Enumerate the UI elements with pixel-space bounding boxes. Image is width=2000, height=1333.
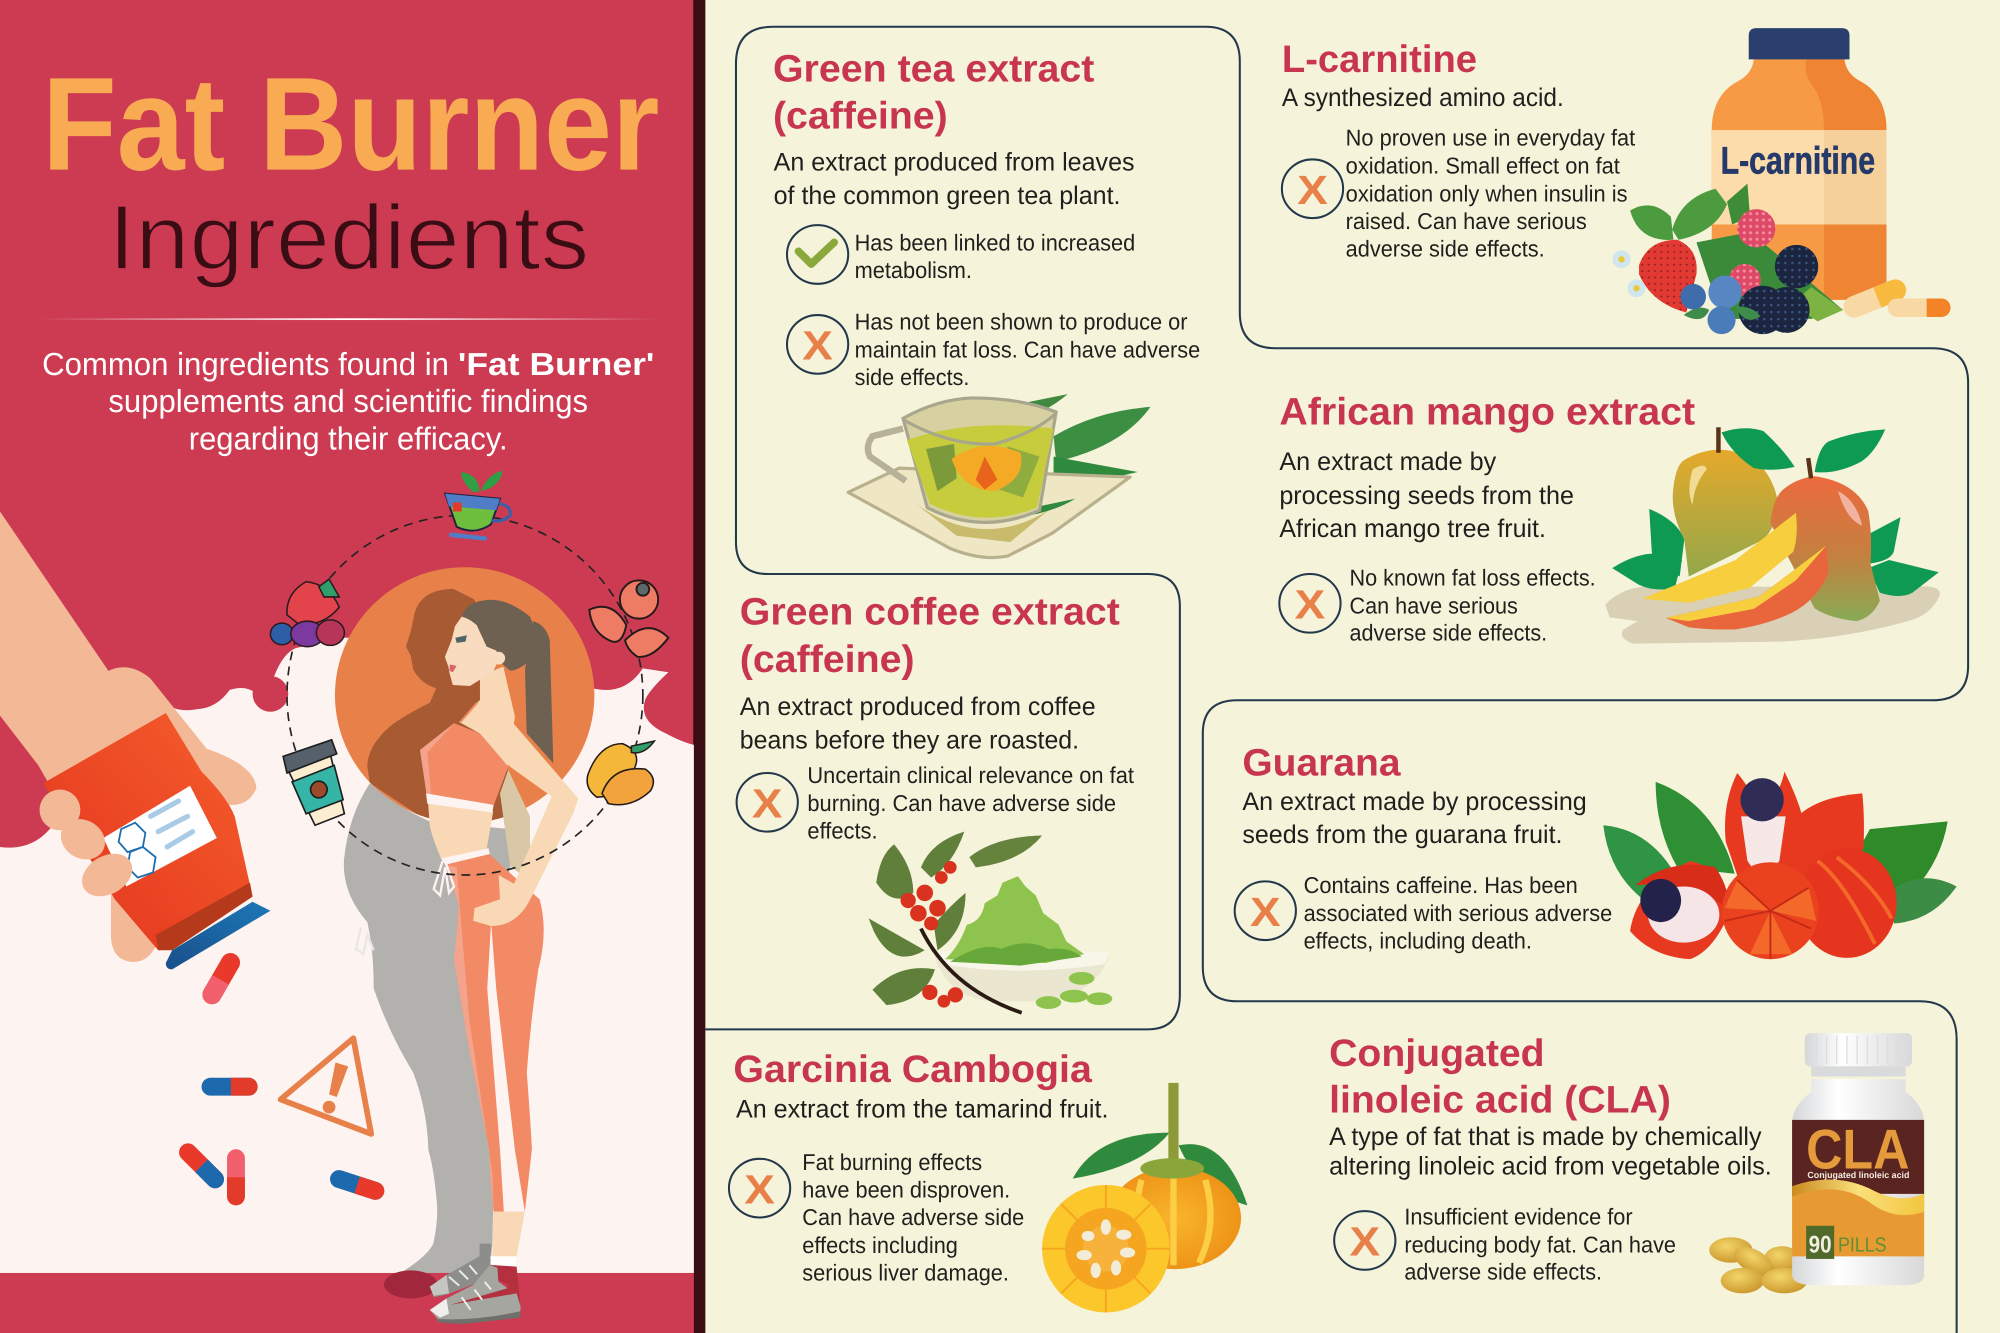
finding: benefit: metabolism. — [855, 258, 972, 283]
description — [1279, 448, 1574, 543]
panel: African mango extract — [1279, 391, 1940, 645]
finding: burning. Can have adverse side — [807, 791, 1116, 816]
description: An extract made by processing — [1242, 788, 1587, 816]
face — [445, 612, 503, 686]
finding: effects, including death. — [1304, 928, 1532, 953]
bottom band — [0, 1273, 694, 1333]
shoes and floor shadow — [384, 1244, 521, 1324]
illustration: L-carnitine bottle — [1712, 28, 1951, 321]
illustration: CLA bottle: PILLS — [1838, 1235, 1886, 1256]
panel: guarana — [1235, 742, 1957, 959]
illustration: CLA softgels — [1709, 1237, 1807, 1293]
icon: x: X — [744, 1166, 776, 1212]
intro text: supplements and scientific findings — [108, 384, 588, 420]
finding: negative: maintain fat loss. Can have adverse — [855, 337, 1200, 363]
illustration: mangoes — [1605, 427, 1940, 644]
heading: Conjugated — [1329, 1033, 1545, 1075]
panel borders — [705, 27, 1968, 1333]
illustration: green coffee — [869, 832, 1112, 1013]
finding: negative: side effects. — [855, 365, 969, 390]
heading: (caffeine) — [740, 639, 915, 681]
title: Fat Burner: Fat Burner — [42, 51, 659, 199]
description — [740, 693, 1096, 755]
description: A synthesized amino acid. — [1282, 84, 1564, 112]
finding: No known fat loss effects. — [1349, 565, 1596, 591]
intro text — [42, 347, 654, 457]
leggings — [445, 853, 544, 1212]
heading — [1329, 1033, 1671, 1122]
panel: green tea extract — [773, 48, 1200, 558]
finding: effects including — [802, 1233, 958, 1258]
heading — [740, 592, 1120, 681]
dashed orbit — [287, 515, 643, 875]
finding: adverse side effects. — [1346, 236, 1545, 261]
finding: Can have adverse side — [802, 1205, 1024, 1230]
finding: adverse side effects. — [1404, 1259, 1602, 1284]
description — [774, 149, 1135, 210]
finding: Contains caffeine. Has been — [1304, 872, 1578, 898]
finding: negative — [855, 309, 1200, 390]
illustration: CLA bottle: CLA — [1806, 1119, 1909, 1181]
back arm — [500, 770, 530, 875]
arm and hand — [473, 707, 578, 926]
panel: garcinia cambogia — [729, 1049, 1247, 1313]
icon: x: X — [1250, 889, 1282, 935]
illustration: CLA bottle: 90 — [1809, 1232, 1832, 1259]
finding: effects. — [807, 818, 878, 844]
finding: Fat burning effects — [802, 1150, 982, 1175]
illustration: berries — [1613, 184, 1843, 334]
finding: benefit: Has been linked to increased — [855, 230, 1135, 255]
finding: Insufficient evidence for — [1404, 1204, 1633, 1230]
description: An extract produced from coffee — [740, 693, 1096, 721]
finding: oxidation only when insulin is — [1346, 181, 1628, 207]
description: beans before they are roasted. — [740, 727, 1079, 755]
finding — [1349, 565, 1596, 645]
icon: x: X — [1349, 1219, 1381, 1265]
description: seeds from the guarana fruit. — [1242, 821, 1562, 849]
sports top — [420, 723, 508, 807]
icon: x — [729, 1159, 790, 1217]
icon: guarana nuts — [589, 580, 668, 657]
panel: left title and illustration — [0, 0, 705, 1333]
icon: x — [787, 315, 848, 374]
finding: reducing body fat. Can have — [1404, 1232, 1676, 1258]
midriff — [428, 801, 493, 860]
illustration: CLA bottle: Conjugated linoleic acid — [1807, 1170, 1909, 1180]
finding: Uncertain clinical relevance on fat — [807, 763, 1134, 788]
overweight silhouette shadow — [367, 589, 508, 825]
intro text: Common ingredients found in — [42, 347, 449, 383]
finding — [802, 1150, 1024, 1286]
panel: conjugated linoleic acid — [1329, 1033, 1924, 1293]
intro text: 'Fat Burner' — [458, 347, 654, 383]
finding: associated with serious adverse — [1304, 901, 1612, 926]
waistband and ties — [441, 848, 490, 865]
heading: L-carnitine — [1282, 39, 1477, 81]
heading: Guarana — [1242, 742, 1401, 784]
lower leg — [492, 1212, 525, 1256]
illustration: CLA bottle — [1792, 1033, 1924, 1285]
icon: x: X — [802, 323, 834, 369]
description: altering linoleic acid from vegetable oils. — [1329, 1153, 1772, 1181]
figure: slim woman — [420, 600, 578, 1282]
finding: Can have serious — [1349, 593, 1518, 619]
sock — [490, 1256, 517, 1282]
white cloud ground — [0, 638, 694, 1273]
finding — [1404, 1204, 1676, 1284]
intro text: regarding their efficacy. — [189, 422, 508, 457]
description: An extract produced from leaves — [774, 149, 1135, 177]
heading: Green tea extract — [773, 48, 1094, 90]
illustration: garcinia fruit — [1042, 1083, 1247, 1313]
icon: berries — [270, 579, 344, 647]
subtitle: Ingredients: Ingredients — [108, 188, 589, 290]
hair — [462, 600, 535, 671]
description — [1329, 1123, 1772, 1181]
heading: (caffeine) — [773, 95, 948, 138]
orange sun disc — [335, 567, 594, 823]
icon: x — [1235, 881, 1296, 940]
heading: Garcinia Cambogia — [733, 1049, 1092, 1091]
heading — [773, 48, 1094, 138]
icon: x: X — [1295, 582, 1326, 628]
finding: negative: Has not been shown to produce or — [855, 309, 1188, 335]
finding: No proven use in everyday fat — [1346, 125, 1635, 151]
icon: x — [1282, 159, 1343, 218]
finding: serious liver damage. — [802, 1260, 1009, 1286]
illustration: guarana — [1603, 772, 1957, 959]
icon: coffee cup — [283, 740, 344, 825]
heading: linoleic acid (CLA) — [1329, 1079, 1671, 1122]
pills — [175, 950, 387, 1205]
icon: warning triangle — [281, 1038, 371, 1134]
description: processing seeds from the — [1279, 482, 1574, 510]
description: An extract made by — [1279, 448, 1496, 476]
capsules — [1840, 276, 1910, 321]
heading: Green coffee extract — [740, 592, 1120, 634]
description: of the common green tea plant. — [774, 182, 1121, 210]
overweight gray body — [344, 783, 510, 1273]
icon: mango — [587, 741, 654, 805]
ponytail — [525, 621, 553, 763]
icon: x — [1334, 1211, 1395, 1270]
description: A type of fat that is made by chemically — [1329, 1123, 1761, 1151]
panel: L-carnitine — [1282, 28, 1951, 334]
finding — [807, 763, 1134, 844]
icon: tea cup — [445, 471, 510, 541]
neck and shoulder — [459, 667, 515, 767]
icon: x: X — [1297, 167, 1329, 213]
illustration: green tea cup — [848, 394, 1151, 558]
illustration: L-carnitine bottle: L-carnitine — [1721, 140, 1875, 182]
icon: x — [1279, 574, 1341, 633]
finding: raised. Can have serious — [1346, 209, 1587, 234]
finding: adverse side effects. — [1349, 620, 1547, 645]
finding — [1346, 125, 1635, 261]
description — [1242, 788, 1587, 849]
icon: x: X — [752, 781, 783, 827]
finding — [1304, 872, 1612, 953]
icon: check — [787, 225, 848, 284]
top hem — [426, 793, 494, 813]
finding: have been disproven. — [802, 1177, 1010, 1203]
description: African mango tree fruit. — [1279, 515, 1546, 543]
finding: oxidation. Small effect on fat — [1346, 153, 1620, 179]
heading: African mango extract — [1279, 391, 1695, 433]
finding: benefit — [855, 230, 1135, 283]
panel: green coffee extract — [737, 592, 1134, 1013]
icon: x — [737, 773, 798, 832]
hand holding supplement pack — [0, 511, 270, 969]
description: An extract from the tamarind fruit. — [736, 1096, 1108, 1124]
